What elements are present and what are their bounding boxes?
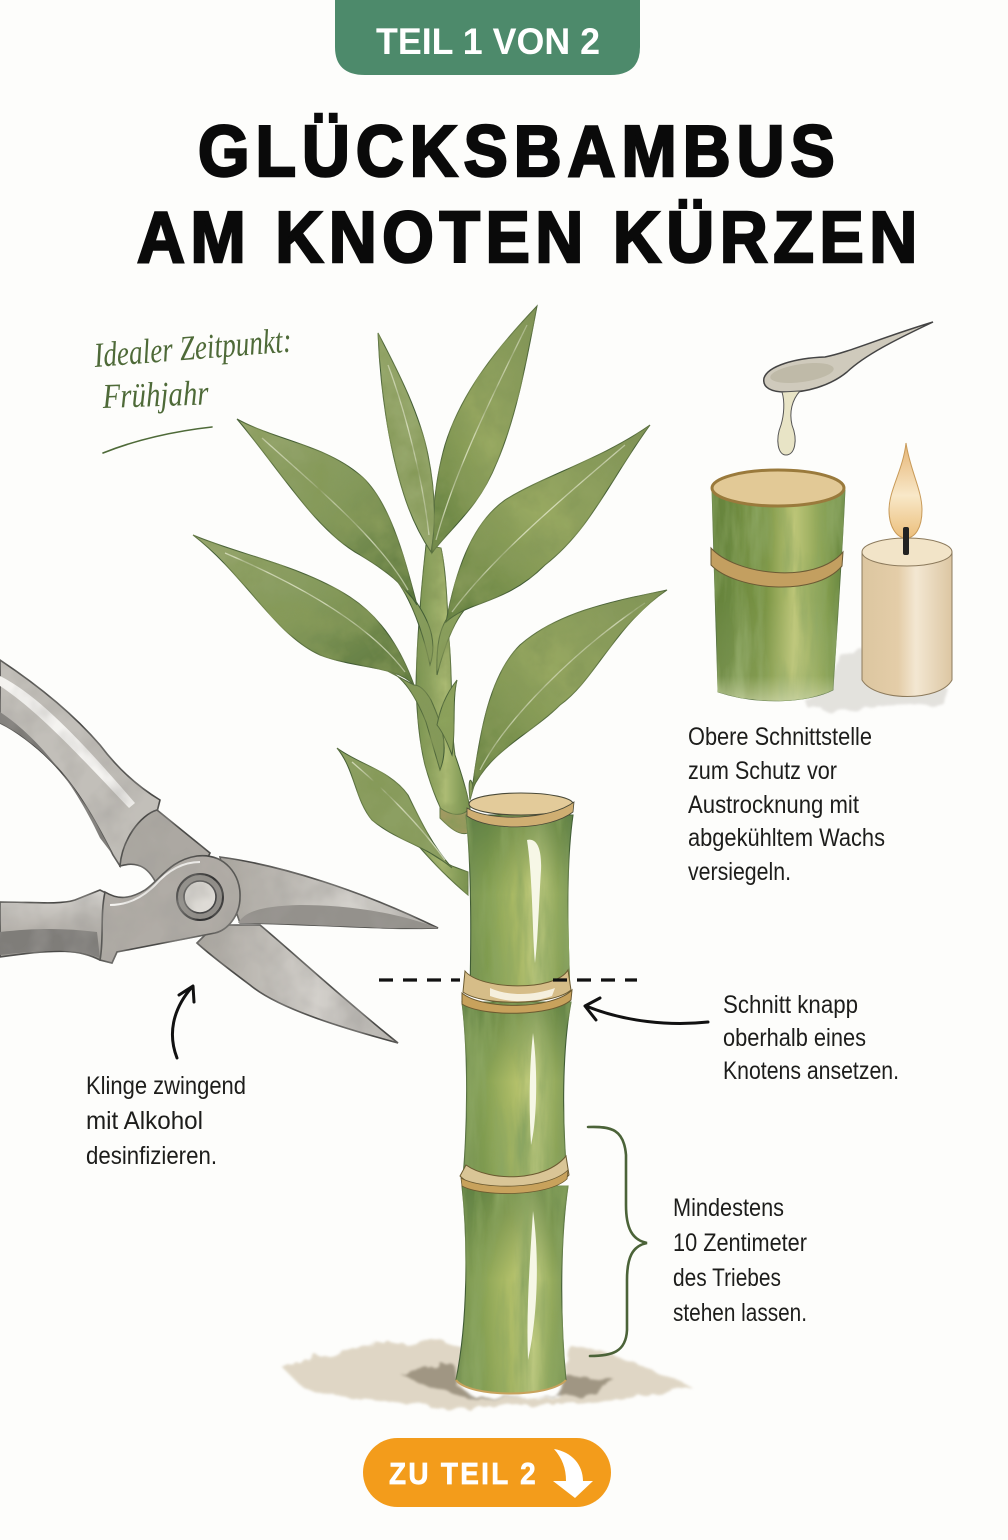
leaf small	[337, 748, 452, 868]
candle top	[862, 538, 952, 566]
upper handle	[0, 660, 160, 866]
pointed sheath	[437, 680, 457, 755]
sheath of right lower leaf	[469, 732, 500, 800]
leaf midribs	[225, 325, 645, 860]
base line	[456, 1380, 566, 1394]
caption: keep 10 cm	[673, 1194, 807, 1327]
part badge	[335, 0, 640, 75]
caption line: Klinge zwingend	[86, 1072, 246, 1100]
handle gleam	[0, 676, 135, 808]
note line 1: Idealer Zeitpunkt:	[92, 321, 293, 375]
button arrow	[553, 1449, 593, 1498]
button shape	[363, 1438, 611, 1507]
caption line: abgekühltem Wachs	[688, 824, 885, 852]
small side branch	[410, 836, 468, 895]
badge shape	[335, 0, 640, 75]
caption line: Mindestens	[673, 1194, 784, 1222]
handle shadow	[0, 712, 113, 855]
title	[137, 110, 917, 278]
note line 2: Frühjahr	[101, 373, 210, 416]
note underline	[103, 427, 212, 453]
node 1 lower ring	[462, 990, 572, 1013]
caption line: zum Schutz vor	[688, 757, 837, 785]
caption line: des Triebes	[673, 1264, 781, 1292]
lower neck and head	[100, 856, 240, 963]
caption: disinfect blade	[86, 1072, 246, 1170]
ground wash	[282, 1340, 690, 1410]
node 2 band	[461, 1170, 568, 1194]
illustration: bamboo shoot with leaves	[193, 306, 667, 895]
flame	[889, 443, 922, 538]
caption line: oberhalb eines	[723, 1024, 866, 1052]
arrow: to blade	[172, 986, 194, 1058]
sheath of right upper leaf	[437, 602, 473, 675]
main stalk	[416, 545, 470, 825]
handwritten note: ideal time	[92, 321, 293, 453]
button label: ZU TEIL 2	[389, 1457, 536, 1491]
caption: seal with wax	[688, 723, 885, 886]
cap of cut	[469, 793, 573, 815]
caption line: stehen lassen.	[673, 1299, 807, 1327]
wick	[903, 527, 909, 555]
grip shadow	[0, 929, 100, 958]
piece node	[711, 548, 843, 587]
short stem piece	[712, 490, 845, 701]
blade ridge	[238, 905, 438, 928]
node 1 highlight	[490, 988, 555, 1001]
stem body	[712, 490, 845, 701]
upper blade	[220, 857, 438, 928]
title line 1: GLÜCKSBAMBUS	[198, 110, 835, 192]
stem segment 1	[466, 815, 573, 992]
caption line: Schnitt knapp	[723, 991, 858, 1019]
caption line: Knotens ansetzen.	[723, 1057, 899, 1085]
stem details	[456, 793, 574, 1394]
caption: cut above node	[723, 991, 899, 1085]
illustration: pruning shears	[0, 660, 438, 1043]
cap rim	[467, 802, 574, 827]
title line 2: AM KNOTEN KÜRZEN	[137, 196, 917, 278]
caption line: mit Alkohol	[86, 1107, 203, 1135]
lower blade	[197, 925, 398, 1043]
piece cap	[712, 470, 844, 506]
lower handle grip	[0, 890, 114, 960]
leaf left upper	[237, 419, 417, 605]
shade 3	[456, 1186, 568, 1394]
stem highlights	[527, 840, 541, 1360]
upper neck	[120, 810, 210, 885]
leaf right lower	[472, 590, 667, 790]
leaf left lower	[193, 535, 414, 685]
node 1 upper band	[463, 970, 571, 1002]
leaf right upper	[446, 425, 650, 622]
spoon	[764, 322, 933, 392]
stem piece fade	[712, 600, 842, 701]
stem segment 3	[456, 1186, 568, 1394]
head gleam	[110, 862, 200, 905]
spoon bowl wax	[769, 360, 835, 386]
leaf top left	[378, 333, 434, 552]
button: to part 2	[363, 1438, 611, 1507]
shade 1	[466, 815, 573, 992]
candle body	[862, 552, 952, 696]
caption line: desinfizieren.	[86, 1142, 217, 1170]
arrow: to node	[585, 998, 708, 1023]
illustration: main bamboo stem	[456, 815, 573, 1394]
leaf top right	[432, 306, 537, 553]
stem segment 2	[462, 1002, 571, 1178]
cutting line	[379, 978, 637, 982]
wax drop	[778, 391, 800, 455]
pivot bolt	[177, 874, 223, 920]
caption line: Obere Schnittstelle	[688, 723, 872, 751]
node 2	[460, 1156, 569, 1192]
stalk joint	[440, 808, 470, 834]
sheath of left lower leaf	[380, 667, 444, 770]
caption line: versiegeln.	[688, 858, 791, 886]
caption line: 10 Zentimeter	[673, 1229, 807, 1257]
badge label: TEIL 1 VON 2	[376, 21, 600, 62]
caption line: Austrocknung mit	[688, 791, 859, 819]
pivot center	[184, 881, 216, 913]
sheath of left upper leaf	[385, 568, 433, 665]
shade 2	[462, 1002, 571, 1178]
inset shadow	[807, 648, 950, 710]
inset: wax on cut stem and candle	[711, 322, 952, 710]
soil light	[282, 1340, 690, 1410]
soil dark	[400, 1366, 617, 1400]
brace: remaining length	[588, 1127, 647, 1356]
